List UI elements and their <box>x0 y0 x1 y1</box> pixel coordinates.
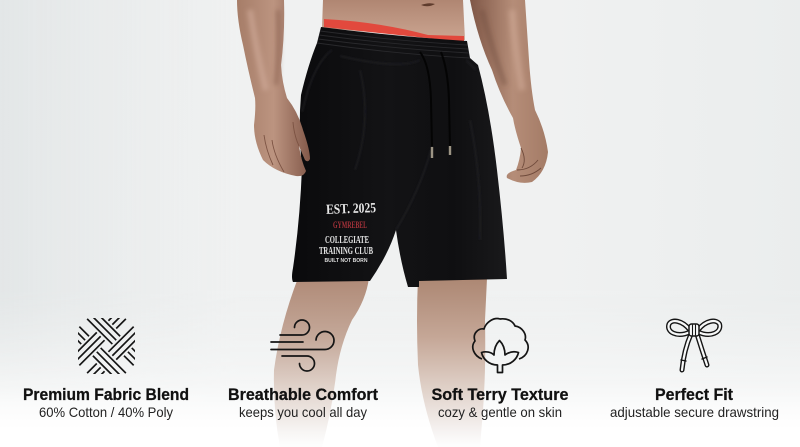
left leg <box>274 278 369 447</box>
pocket and folds <box>302 50 480 240</box>
right arm muscle shading <box>482 10 522 90</box>
shorts print: TRAINING CLUB <box>319 245 373 257</box>
left arm muscle shading <box>250 10 279 90</box>
left arm and hand <box>237 0 310 176</box>
shorts body <box>292 27 507 287</box>
heading: Breathable Comfort <box>228 385 378 404</box>
shorts print <box>319 201 376 264</box>
photo: model wearing black shorts <box>237 0 548 447</box>
red waistband <box>324 19 464 42</box>
subtext: keeps you cool all day <box>239 405 367 420</box>
heading: Soft Terry Texture <box>432 385 568 404</box>
torso <box>322 0 465 40</box>
shorts print: EST. 2025 <box>326 201 376 218</box>
icon: cotton <box>473 319 528 372</box>
icon: drawstring bow <box>669 321 720 370</box>
left hand fingers <box>264 122 299 172</box>
right leg <box>417 278 487 447</box>
feature: soft terry texture <box>432 319 568 420</box>
feature: perfect fit <box>610 321 779 420</box>
feature: breathable comfort <box>228 320 378 420</box>
shorts print: COLLEGIATE <box>325 234 369 246</box>
navel <box>421 3 435 6</box>
subtext: adjustable secure drawstring <box>610 405 779 420</box>
subtext: 60% Cotton / 40% Poly <box>39 405 173 420</box>
shorts print: BUILT NOT BORN <box>324 258 368 264</box>
shorts print: GYMREBEL <box>333 221 367 231</box>
right arm and hand <box>470 0 548 183</box>
waistband ribbing <box>317 31 470 58</box>
heading: Perfect Fit <box>655 385 733 404</box>
subtext: cozy & gentle on skin <box>438 405 562 420</box>
feature: premium fabric blend <box>24 318 188 420</box>
drawstrings <box>420 52 450 146</box>
heading: Premium Fabric Blend <box>23 385 189 404</box>
right hand fingers <box>517 148 541 176</box>
icon: wind <box>271 320 334 371</box>
icon: woven fabric <box>78 318 135 374</box>
